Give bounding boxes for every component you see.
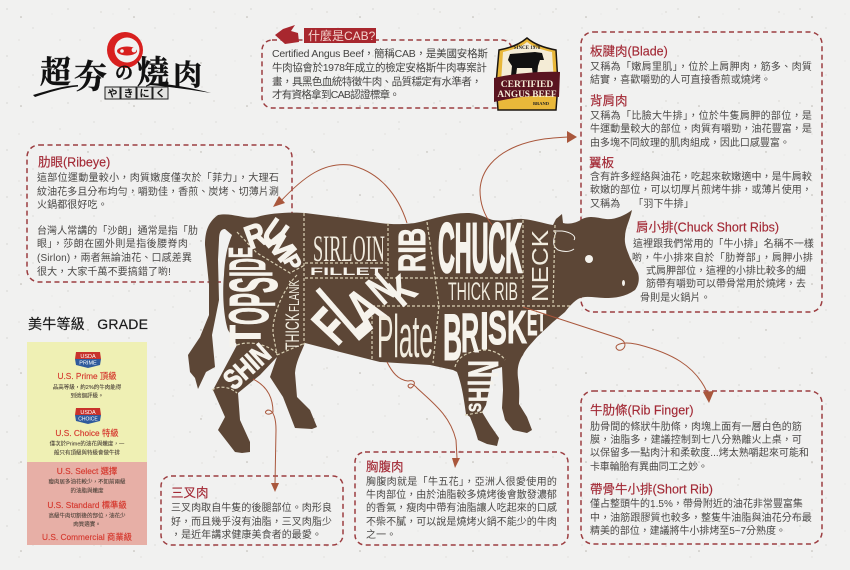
ribeye text: 很大，大家千萬不要搞錯了喲! [37, 265, 171, 278]
logo red cloud seal [107, 32, 143, 68]
choice label: 僅次於Prime的油花與嫩度，一 [50, 440, 125, 448]
grade background lower [27, 462, 147, 545]
standard label [47, 500, 127, 528]
cow silhouette with cuts: CHUCK [438, 209, 522, 287]
cut label: front SHIN [460, 360, 508, 412]
ribeye heading: 肋眼(Ribeye) [38, 154, 110, 170]
rib finger text: 卡車輪胎有異曲同工之妙。 [590, 460, 708, 473]
panel: ribeye [27, 145, 292, 282]
cow silhouette with cuts: SIRLOIN [313, 229, 385, 270]
prime label [53, 371, 122, 400]
badge: USDA choice: USDA [80, 410, 96, 416]
topside text: 三叉肉取自牛隻的後腿部位。肉形良 [171, 501, 332, 514]
cut label: THICK FLANK: THICK [283, 313, 304, 350]
belly text: 牛肉部位，由於油脂較多燒烤後會散發濃郁 [366, 488, 557, 501]
badge: USDA prime: PRIME [79, 360, 97, 366]
cut label: RUMP [240, 210, 306, 275]
badge: USDA prime: USDA [80, 354, 96, 360]
cut label: front SHIN: N [460, 360, 508, 378]
standard label: U.S. Standard 標準級 [47, 500, 127, 510]
grade background upper [27, 342, 147, 462]
CAB text: 牛肉協會於1978年成立的檢定安格斯牛肉專案計 [272, 61, 487, 74]
cut label: BRISKET: K [507, 303, 527, 354]
panel: blade, chuck flap, chuck short ribs [581, 32, 822, 312]
wing plate text: 軟嫩的部位，可以切厚片煎烤牛排，或薄片使用， [590, 183, 812, 196]
back shoulder text: 牛運動量較大的部位，肉質有嚼勁，油花豐富，是 [590, 122, 812, 135]
back shoulder text: 又稱為「比臉大牛排」，位於牛隻肩胛的部位，是 [590, 109, 812, 122]
cut label: NECK: NECK [527, 229, 553, 302]
ribeye text: 這部位運動量較小，肉質嫩度僅次於「菲力」，大理石 [37, 171, 279, 184]
chuck short ribs heading: 肩小排(Chuck Short Ribs) [636, 220, 779, 234]
cut label: FLANK: L [301, 264, 388, 358]
cut label: FLANK: A [334, 276, 396, 342]
standard label: 高級牛肉切割後的部位，油花少 [48, 512, 126, 520]
panel: topside [161, 476, 343, 545]
cut label: BRISKET [443, 301, 546, 374]
rib finger text [590, 420, 809, 473]
select label: 瘦肉居多油花較少，不如前兩級 [48, 478, 126, 486]
blade heading: 板腱肉(Blade) [590, 44, 668, 58]
blade text: 結實，喜歡嚼勁的人可直接香煎或燒烤。 [590, 73, 771, 86]
panel: USDA grades [27, 316, 148, 545]
panel: brisket belly [355, 452, 568, 545]
CAB text [272, 47, 488, 101]
cut label: TOPSIDE: D [220, 258, 277, 271]
logo tiles: やきにく: き [124, 88, 134, 100]
panel: what is CAB [262, 25, 512, 108]
select label: U.S. Select 選擇 [57, 466, 117, 476]
cut label: FILLET: FILLET [310, 266, 384, 278]
back shoulder heading: 背肩肉 [590, 93, 628, 108]
logo tiles: やきにく: や [108, 88, 118, 100]
icon: pointing hand [275, 25, 299, 44]
cut label: FLANK [301, 264, 424, 358]
short rib text [590, 497, 812, 537]
logo: 超夯の燒肉 [33, 32, 211, 100]
CAB text: Certified Angus Beef，簡稱CAB，是美國安格斯 [272, 47, 488, 60]
cut label: TOPSIDE: S [216, 277, 292, 293]
cut label: BRISKET: S [488, 303, 507, 355]
ribeye text: 紋油花多且分布均勻，嚼勁佳，香煎、炭烤、切薄片涮 [37, 185, 279, 198]
belly text [366, 475, 557, 541]
belly text: 胸腹肉就是「牛五花」，亞洲人很愛使用的 [366, 475, 557, 488]
cut label: BRISKET: T [537, 306, 546, 339]
prime label: 到這個評級。 [70, 392, 104, 400]
cut label: FLANK: N [358, 264, 404, 313]
rib finger text: 以保留多一點肉汁和柔軟度...烤太熟嚼起來可能和 [590, 446, 809, 459]
topside text [171, 501, 332, 541]
cow horn outline [553, 231, 575, 251]
cut label: FLANK: F [301, 297, 361, 355]
prime label: U.S. Prime 頂級 [57, 371, 117, 381]
ribeye text [37, 171, 279, 278]
logo lettering: 燒 [137, 47, 169, 93]
cow silhouette with cuts [188, 209, 639, 453]
cut label: RUMP: R [240, 215, 271, 257]
cow body [188, 210, 639, 453]
cut label: TOPSIDE: O [218, 307, 281, 325]
wing plate text: 含有許多經絡與油花，吃起來軟嫩適中，是牛肩較 [590, 170, 812, 183]
CAB text: 畫，具黑色血統特徵牛肉、品質穩定有水準者， [272, 75, 482, 88]
cut label: THICK RIB: THICK RIB [448, 278, 518, 306]
topside heading: 三叉肉 [171, 486, 209, 500]
arrow: brisket to rib finger [523, 307, 714, 403]
select label: 的油脂與嫩度 [70, 486, 104, 494]
cut label: front SHIN: I [461, 380, 501, 386]
cut label: rear SHIN: SHIN [217, 338, 277, 395]
wing plate text [590, 170, 812, 210]
logo lettering [40, 47, 202, 98]
rib finger text: 膜，油脂多，建議控制到七八分熟離火上桌，可 [590, 433, 802, 446]
cut label: TOPSIDE: I [217, 271, 285, 277]
cut label: RUMP: P [278, 250, 306, 275]
ribeye text: 火鍋都很好吃。 [37, 198, 108, 211]
icon: Certified Angus Beef badge: ANGUS BEEF [497, 90, 557, 100]
cut label: TOPSIDE [216, 247, 292, 347]
ribeye text: 台灣人常講的「沙朗」通常是指「肋 [37, 224, 198, 237]
CAB heading tag: 什麼是CAB? [308, 28, 376, 43]
short rib text: 中，油筋跟膠質也較多，整隻牛油脂與油花分布最 [590, 511, 812, 524]
badge: USDA choice: CHOICE [78, 416, 98, 422]
cut label: TOPSIDE: T [221, 325, 270, 347]
badge: USDA prime [75, 352, 101, 368]
icon: Certified Angus Beef badge: SINCE 1978 [514, 46, 541, 51]
belly text: 不柴不膩，可以說是燒烤火鍋不能少的牛肉 [366, 515, 557, 528]
short rib heading: 帶骨牛小排(Short Rib) [590, 482, 713, 496]
standard label: 肉質適實。 [73, 520, 101, 528]
cut label: front SHIN: S [466, 403, 486, 412]
logo tiles: やきにく: に [140, 88, 150, 100]
cow nostril [622, 280, 625, 286]
logo lettering: 肉 [173, 53, 202, 94]
chuck short ribs text: 式肩胛部位，這裡的小排比較多的細 [646, 264, 806, 277]
chuck short ribs text: 喲，牛小排來自於「肋脊部」，肩胛小排 [632, 251, 813, 264]
cut label: TOPSIDE: P [217, 293, 290, 307]
logo lettering: 超 [40, 47, 71, 92]
back shoulder text [590, 109, 812, 149]
cut label: RUMP: M [259, 225, 303, 268]
chuck short ribs text: 骨則是火鍋片。 [640, 291, 711, 304]
arrow: shin to topside [253, 379, 279, 492]
icon: Certified Angus Beef badge [494, 38, 560, 110]
back shoulder text: 由多塊不同紋理的肌肉組成，因此口感豐富。 [590, 136, 790, 149]
cut label: BRISKET: R [461, 303, 479, 365]
logo tiles: やきにく: く [156, 88, 166, 100]
commercial label: U.S. Commercial 商業級 [42, 532, 132, 542]
belly text: 的香氣，瘦肉中帶有油脂讓人吃起來的口感 [366, 501, 557, 514]
cut lines [212, 213, 572, 415]
cut label: FLANK: K [379, 267, 424, 315]
cut label: RUMP: U [256, 210, 295, 255]
icon: Certified Angus Beef badge: CERTIFIED [501, 80, 553, 90]
choice label: 般只有頂級與特級會做牛排 [54, 448, 120, 456]
short rib text: 僅占整頭牛的1.5%，帶骨附近的油花非常豐富集 [590, 497, 803, 510]
cow eye [585, 255, 593, 263]
arrow: rib to ribeye [273, 165, 407, 223]
blade text: 又稱為「嫩肩里肌」，位於上肩胛肉，筋多、肉質 [590, 60, 812, 73]
prime label: 品高等級，約2%的牛肉能得 [53, 383, 122, 391]
belly heading: 胸腹肉 [366, 460, 404, 474]
CAB text: 才有資格拿到CAB認證標章。 [272, 88, 400, 101]
logo lettering: の [115, 59, 133, 85]
chuck short ribs text: 筋帶有嚼勁可以帶骨常用於燒烤，去 [646, 277, 806, 290]
badge: USDA choice [75, 408, 101, 424]
cut label: RIB: RIB [392, 228, 434, 272]
icon: Certified Angus Beef badge: BRAND [533, 101, 550, 106]
topside text: ，是近年講求健康美食者的最愛。 [171, 528, 322, 541]
chuck short ribs text: 這裡跟我們常用的「牛小排」名稱不一樣 [633, 237, 814, 250]
logo tiles: やきにく [105, 87, 168, 100]
wing plate text: 又稱為 「羽下牛排」 [590, 197, 694, 210]
belly text: 之一。 [366, 528, 396, 541]
short rib text: 精美的部位，建議將牛小排烤至5~7分熟度。 [590, 524, 786, 537]
cut label: BRISKET: B [443, 301, 462, 374]
topside text: 好，而且幾乎沒有油脂，三叉肉脂少 [171, 515, 332, 528]
rib finger heading: 牛肋條(Rib Finger) [590, 402, 694, 418]
logo lettering: 夯 [74, 51, 107, 98]
ribeye text: 眼」，莎朗在國外則是指後腰脊肉 [37, 237, 188, 250]
ribeye text: (Sirlon)，兩者無論油花、口感差異 [37, 251, 192, 264]
panel: rib finger and short rib [581, 391, 822, 544]
arrow: chuck to blade panel [480, 131, 577, 225]
cut label: TOPSIDE: E [222, 247, 260, 258]
choice label: U.S. Choice 特級 [55, 428, 119, 438]
rib finger text: 肋骨間的條狀牛肋條，肉塊上面有一層白色的筋 [590, 420, 802, 433]
arrow: plate to belly [387, 362, 460, 468]
cut label: front SHIN: H [464, 387, 496, 402]
cut label: BRISKET: E [527, 303, 538, 343]
cut label: THICK FLANK: FLANK [286, 280, 303, 312]
cow silhouette with cuts: Plate [377, 303, 433, 370]
wing plate heading: 翼板 [589, 156, 615, 170]
select label [48, 466, 126, 494]
cut label: BRISKET: I [480, 302, 489, 361]
blade text [590, 60, 812, 86]
choice label [50, 428, 125, 456]
grade title: 美牛等級 GRADE [28, 316, 148, 332]
logo brush stroke [33, 83, 211, 97]
chuck short ribs text [632, 237, 814, 304]
